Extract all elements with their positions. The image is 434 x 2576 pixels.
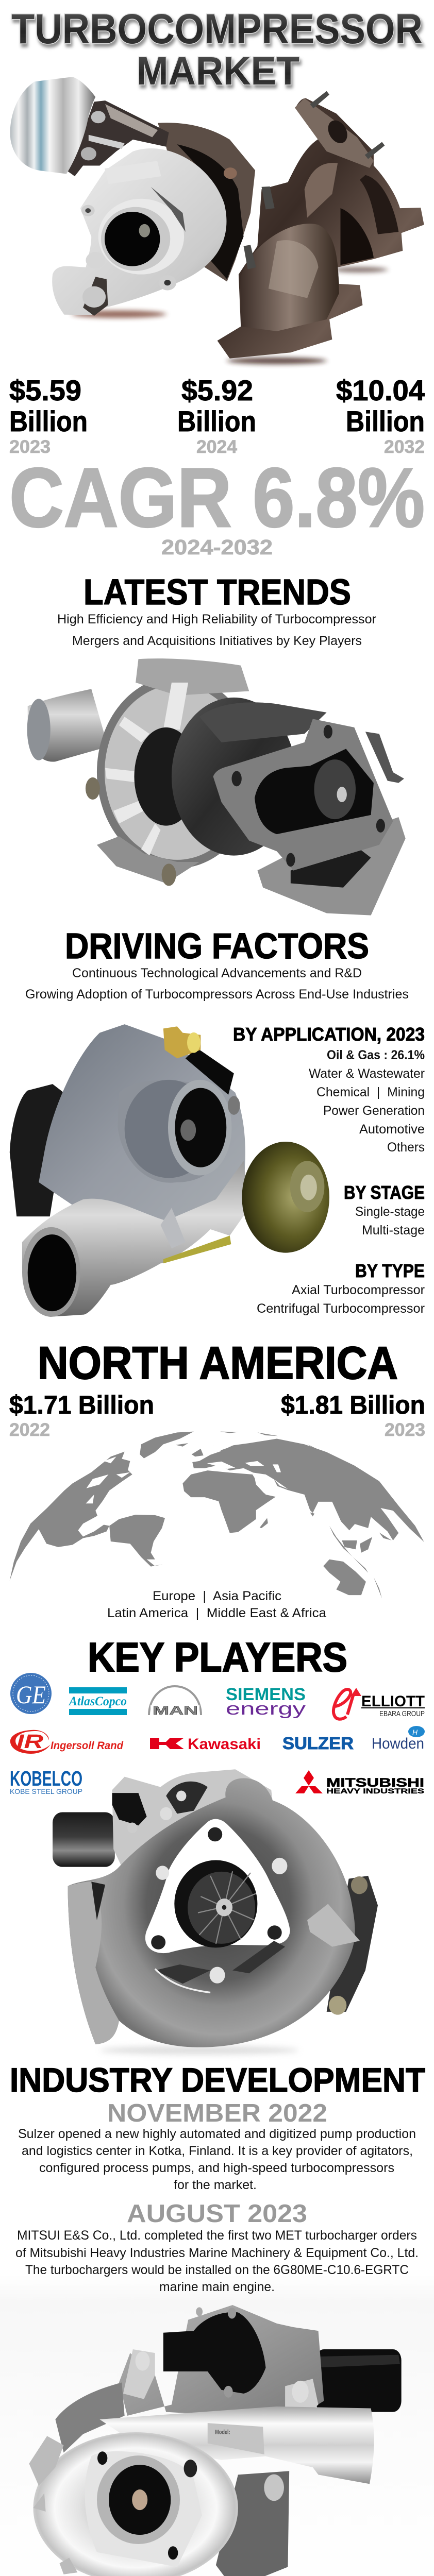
heading: driving factors: DRIVING FACTORS	[65, 926, 369, 966]
logo: Atlas Copco: AtlasCopco	[68, 1694, 127, 1708]
panel: by application: Automotive	[359, 1122, 425, 1137]
logo: Siemens Energy	[226, 1685, 306, 1719]
august development text: marine main engine.	[159, 2280, 275, 2294]
logo: Siemens Energy: energy	[226, 1699, 306, 1719]
panel: by application: Others	[387, 1140, 425, 1155]
panel: by stage: Multi-stage	[362, 1223, 425, 1238]
logo: Howden: H	[412, 1728, 418, 1736]
driving factors text: Continuous Technological Advancements and R&D	[72, 966, 362, 980]
image: chrome turbocharger with actuator	[0, 2276, 434, 2576]
driving factors text: Growing Adoption of Turbocompressors Across End-Use Industries	[25, 987, 409, 1002]
logo: GE	[10, 1673, 52, 1714]
logo: Ingersoll Rand	[10, 1730, 124, 1754]
regional value 2022: 2022	[9, 1420, 50, 1440]
world map globe	[10, 1432, 424, 1599]
logo: MAN: MAN	[153, 1704, 198, 1718]
CAGR period: 2024-2032	[161, 535, 273, 559]
title	[11, 6, 423, 93]
panel: by type: BY TYPE	[355, 1260, 425, 1281]
image: turbocharger rear view	[27, 658, 406, 916]
market size 2032: Billion	[346, 405, 425, 437]
regional value 2023: $1.81 Billion	[281, 1391, 425, 1419]
logo: Howden: Howden	[372, 1735, 424, 1752]
panel: by application: Chemical | Mining	[316, 1085, 425, 1099]
august development text: MITSUI E&S Co., Ltd. completed the first two MET turbocharger orders	[17, 2228, 417, 2243]
market size 2024: $5.92	[181, 374, 253, 406]
logo: Mitsubishi Heavy Industries: MITSUBISHI	[326, 1776, 424, 1790]
latest trends text: High Efficiency and High Reliability of Turbocompressor	[57, 612, 376, 626]
panel: by type	[257, 1260, 425, 1316]
market size 2024	[177, 374, 256, 457]
market size 2023: $5.59	[9, 374, 81, 406]
august development text	[15, 2228, 419, 2294]
logo: Elliott: EBARA GROUP	[379, 1709, 425, 1718]
other regions list: Europe | Asia Pacific	[153, 1589, 281, 1603]
logo: Elliott: ELLIOTT	[361, 1693, 425, 1710]
heading: north america: NORTH AMERICA	[38, 1337, 398, 1388]
image: chrome turbocharger with actuator: Model:	[215, 2429, 230, 2436]
logo: Siemens Energy: SIEMENS	[226, 1685, 306, 1704]
logo: Atlas Copco	[68, 1687, 127, 1715]
logo: Kawasaki: Kawasaki	[188, 1736, 261, 1753]
regional value 2022	[9, 1391, 154, 1440]
logo: Kawasaki	[150, 1736, 261, 1753]
panel: by application: Water & Wastewater	[309, 1066, 425, 1081]
november development text	[18, 2127, 416, 2192]
market size 2032: 2032	[384, 437, 425, 457]
regional value 2023	[281, 1391, 425, 1440]
heading: latest trends: LATEST TRENDS	[84, 572, 351, 612]
regional value 2023: 2023	[385, 1420, 425, 1440]
logo: Sulzer: SULZER	[282, 1734, 354, 1753]
other regions list: Latin America | Middle East & Africa	[107, 1606, 326, 1620]
panel: by stage	[344, 1182, 425, 1238]
logo: Ingersoll Rand: Ingersoll Rand	[51, 1740, 124, 1752]
logo: GE: GE	[16, 1680, 46, 1709]
logo: MAN	[149, 1686, 201, 1718]
driving factors text	[25, 966, 409, 1002]
november development text: and logistics center in Kotka, Finland. It is a key provider of agitators,	[22, 2144, 413, 2158]
logo: Mitsubishi Heavy Industries: HEAVY INDUSTRIES	[326, 1787, 424, 1795]
panel: by application	[233, 1024, 425, 1155]
august development text: The turbochargers would be installed on the 6G80ME-C10.6-EGRTC	[25, 2263, 409, 2277]
image: turbine housing with triangular flange	[53, 1769, 378, 2055]
november development text: configured process pumps, and high-speed turbocompressors	[39, 2161, 394, 2175]
logo: Mitsubishi Heavy Industries	[295, 1770, 424, 1795]
panel: by application: Oil & Gas : 26.1%	[327, 1048, 425, 1062]
market size 2024: Billion	[177, 405, 256, 437]
november development text: for the market.	[174, 2178, 257, 2192]
logo: Kobelco: KOBE STEEL GROUP	[10, 1787, 82, 1795]
panel: by type: Centrifugal Turbocompressor	[257, 1301, 425, 1316]
panel: by stage: Single-stage	[355, 1205, 425, 1219]
market size 2023: 2023	[9, 437, 51, 457]
market size 2032	[336, 374, 425, 457]
logo: Howden	[372, 1726, 425, 1752]
market size 2023	[9, 374, 88, 457]
title: MARKET	[137, 49, 299, 93]
august development text: of Mitsubishi Heavy Industries Marine Machinery & Equipment Co., Ltd.	[15, 2246, 419, 2260]
latest trends text: Mergers and Acquisitions Initiatives by Key Players	[72, 634, 362, 648]
logo: Elliott	[333, 1688, 425, 1719]
panel: by application: Power Generation	[323, 1104, 425, 1118]
market size 2023: Billion	[9, 405, 88, 437]
panel: by application: BY APPLICATION, 2023	[233, 1024, 425, 1045]
image: turbocharger with exhaust manifold	[10, 77, 424, 364]
logo: Ingersoll Rand: IR	[16, 1731, 44, 1753]
logo: Kobelco: KOBELCO	[10, 1767, 82, 1790]
panel: by type: Axial Turbocompressor	[292, 1283, 425, 1297]
logo: Kobelco	[10, 1767, 82, 1795]
latest trends text	[57, 612, 376, 648]
date: August 2023: AUGUST 2023	[127, 2200, 307, 2228]
image: turbocharger with olive wastegate	[10, 1024, 329, 1317]
market size 2024: 2024	[196, 437, 238, 457]
market size 2032: $10.04	[336, 374, 425, 406]
regional value 2022: $1.71 Billion	[9, 1391, 154, 1419]
november development text: Sulzer opened a new highly automated and digitized pump production	[18, 2127, 416, 2141]
other regions list	[107, 1589, 326, 1620]
date: November 2022: NOVEMBER 2022	[107, 2099, 327, 2127]
heading: key players: KEY PLAYERS	[88, 1634, 347, 1680]
